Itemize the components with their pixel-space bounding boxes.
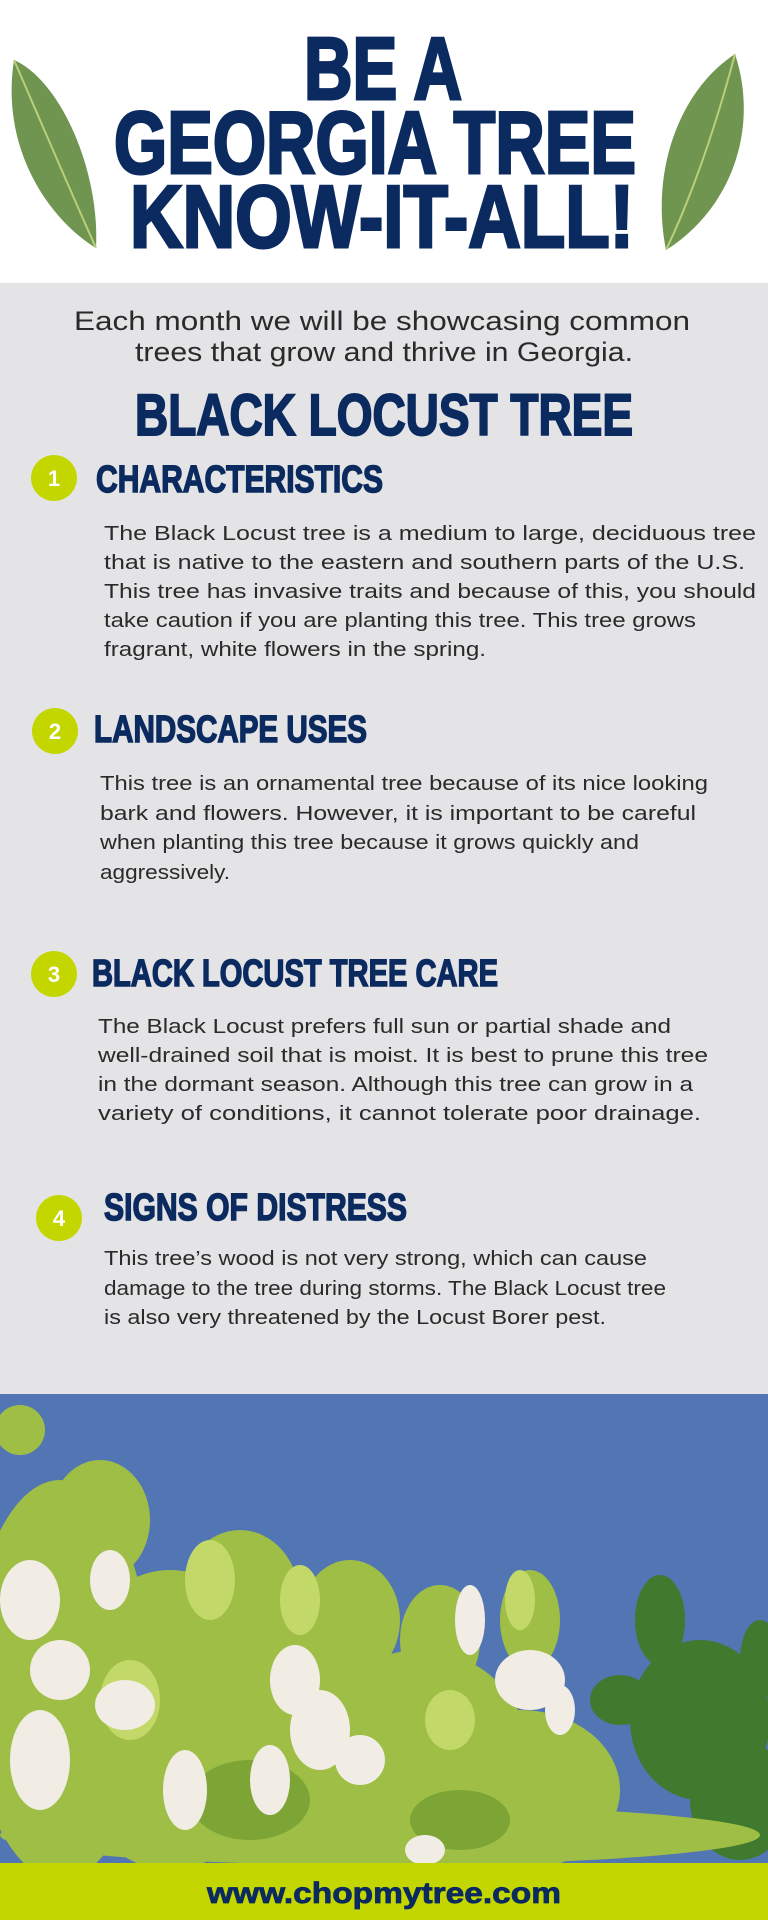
section 3: tree care: The Black Locust prefers full sun or partial shade and (98, 1016, 671, 1038)
section 1: characteristics: This tree has invasive traits and because of this, you should (104, 581, 756, 603)
section 4: signs of distress: is also very threatened by the Locust Borer pest. (104, 1307, 606, 1329)
section 4: signs of distress: damage to the tree during storms. The Black Locust tree (104, 1278, 666, 1300)
section 2: landscape uses: bark and flowers. However, it is important to be careful (100, 803, 696, 825)
section 3: tree care: in the dormant season. Although this tree can grow in a (98, 1074, 694, 1096)
section 3: tree care: variety of conditions, it cannot tolerate poor drainage. (98, 1103, 701, 1125)
footer: website: www.chopmytree.com (206, 1877, 561, 1910)
section 2: landscape uses: This tree is an ornamental tree because of its nice looking (100, 773, 708, 795)
section 3: tree care: well-drained soil that is moist. It is best to prune this tree (97, 1045, 708, 1067)
photo: black locust tree in bloom (0, 1394, 768, 1880)
section 1: characteristics: 1 (48, 466, 60, 491)
section 1: characteristics (31, 455, 756, 661)
section 1: characteristics: CHARACTERISTICS (96, 459, 383, 501)
title: KNOW-IT-ALL! (130, 167, 634, 266)
section 2: landscape uses: LANDSCAPE USES (94, 709, 367, 751)
section 3: tree care: BLACK LOCUST TREE CARE (92, 953, 498, 995)
intro text: trees that grow and thrive in Georgia. (135, 337, 633, 367)
section 1: characteristics: The Black Locust tree is a medium to large, deciduous tree (104, 523, 756, 545)
title (114, 19, 636, 266)
title: GEORGIA TREE (114, 93, 636, 192)
subtitle: Black Locust Tree: BLACK LOCUST TREE (135, 383, 633, 448)
section 2: landscape uses (32, 708, 708, 884)
section 3: tree care (31, 951, 708, 1125)
icon: right leaf (662, 54, 744, 250)
section 3: tree care: 3 (48, 962, 60, 987)
section 2: landscape uses: when planting this tree because it grows quickly and (99, 832, 639, 854)
section 1: characteristics: that is native to the eastern and southern parts of the U.S. (104, 552, 745, 574)
icon: left leaf (12, 60, 96, 248)
section 1: characteristics: fragrant, white flowers in the spring. (104, 639, 486, 661)
title: BE A (304, 19, 462, 118)
section 2: landscape uses: aggressively. (100, 862, 230, 884)
footer: website (0, 1863, 768, 1920)
section 4: signs of distress: This tree’s wood is not very strong, which can cause (104, 1248, 647, 1270)
intro text (74, 306, 690, 367)
section 4: signs of distress: SIGNS OF DISTRESS (104, 1187, 407, 1229)
section 4: signs of distress: 4 (53, 1206, 66, 1231)
intro text: Each month we will be showcasing common (74, 306, 690, 336)
section 1: characteristics: take caution if you are planting this tree. This tree grows (104, 610, 696, 632)
section 4: signs of distress (36, 1187, 666, 1329)
section 2: landscape uses: 2 (49, 719, 61, 744)
